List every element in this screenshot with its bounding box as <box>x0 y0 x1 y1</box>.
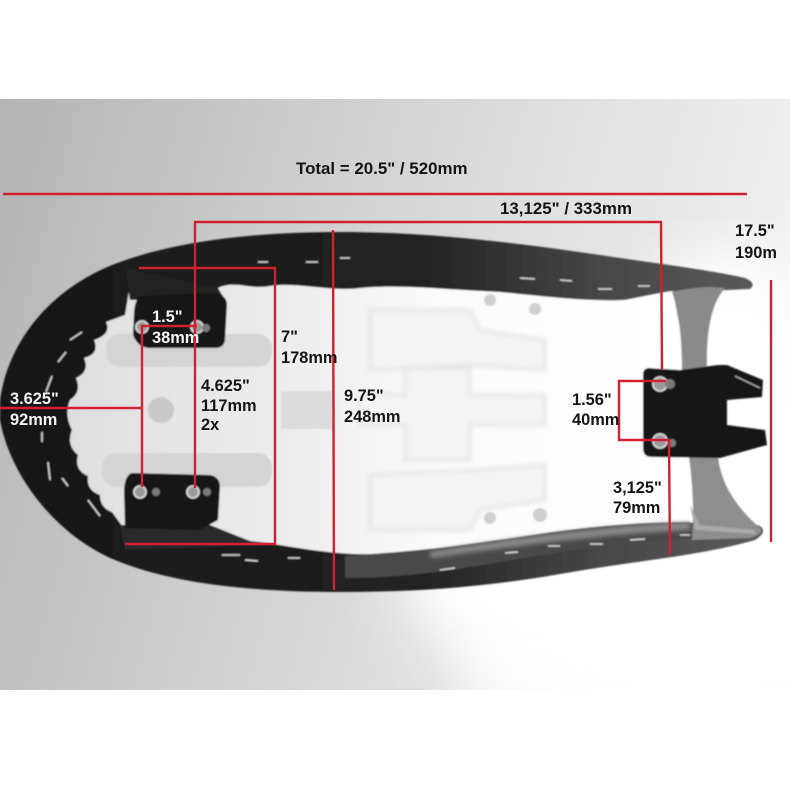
label: 17.5: 17.5" <box>735 222 775 240</box>
side leather flaps <box>672 287 725 372</box>
label: 4.625 inch: 4.625" <box>201 377 250 395</box>
textured lower leather strip <box>345 522 692 578</box>
dimension lines <box>0 194 771 590</box>
label: 2x: 2x <box>201 416 219 434</box>
label: total: Total = 20.5" / 520mm <box>296 159 468 178</box>
bracket: right <box>643 365 767 458</box>
left rear pleats <box>125 268 225 300</box>
line: 13,125 span <box>195 222 662 488</box>
line: total length <box>3 193 747 195</box>
label: 1.5 inch: 1.5" <box>152 308 183 326</box>
seat outer shell <box>0 232 763 592</box>
inner white plate with ruched left edge <box>67 285 695 554</box>
plate moulded recesses <box>102 294 547 524</box>
bolts <box>134 321 667 498</box>
photo background band <box>0 99 790 720</box>
stitching <box>42 258 690 570</box>
bracket: bottom left <box>124 473 220 530</box>
line: 3.625 inch <box>0 407 142 409</box>
infographic: motorcycle seat underside with dimensions <box>0 99 790 690</box>
label: 248mm: 248mm <box>344 408 400 426</box>
label: 3.625 inch: 3.625" <box>10 390 59 408</box>
line: 7 inch bracket <box>125 268 275 544</box>
line: 9.75 inch <box>333 230 334 590</box>
bracket: top left <box>133 293 227 348</box>
label: 3,125 inch: 3,125" <box>613 479 662 497</box>
label: 13,125: 13,125" / 333mm <box>500 199 632 218</box>
label: 40mm: 40mm <box>572 411 619 429</box>
label: 117mm: 117mm <box>201 397 257 415</box>
label: 9.75 inch: 9.75" <box>344 387 384 405</box>
label: 38mm: 38mm <box>152 329 199 347</box>
label: 1.56 inch: 1.56" <box>572 391 612 409</box>
line: 1.56 inch and 3,125 inch <box>619 381 670 555</box>
line: 1.5 inch and 4.625 inch <box>142 326 197 487</box>
label: 79mm: 79mm <box>613 499 660 517</box>
label: 178mm: 178mm <box>281 349 338 367</box>
line: 17.5 inch <box>770 280 772 542</box>
label: 92mm: 92mm <box>10 411 57 429</box>
label: 190m: 190m <box>735 244 777 262</box>
label: 7 inch: 7" <box>281 328 298 346</box>
seat photo <box>0 232 767 592</box>
